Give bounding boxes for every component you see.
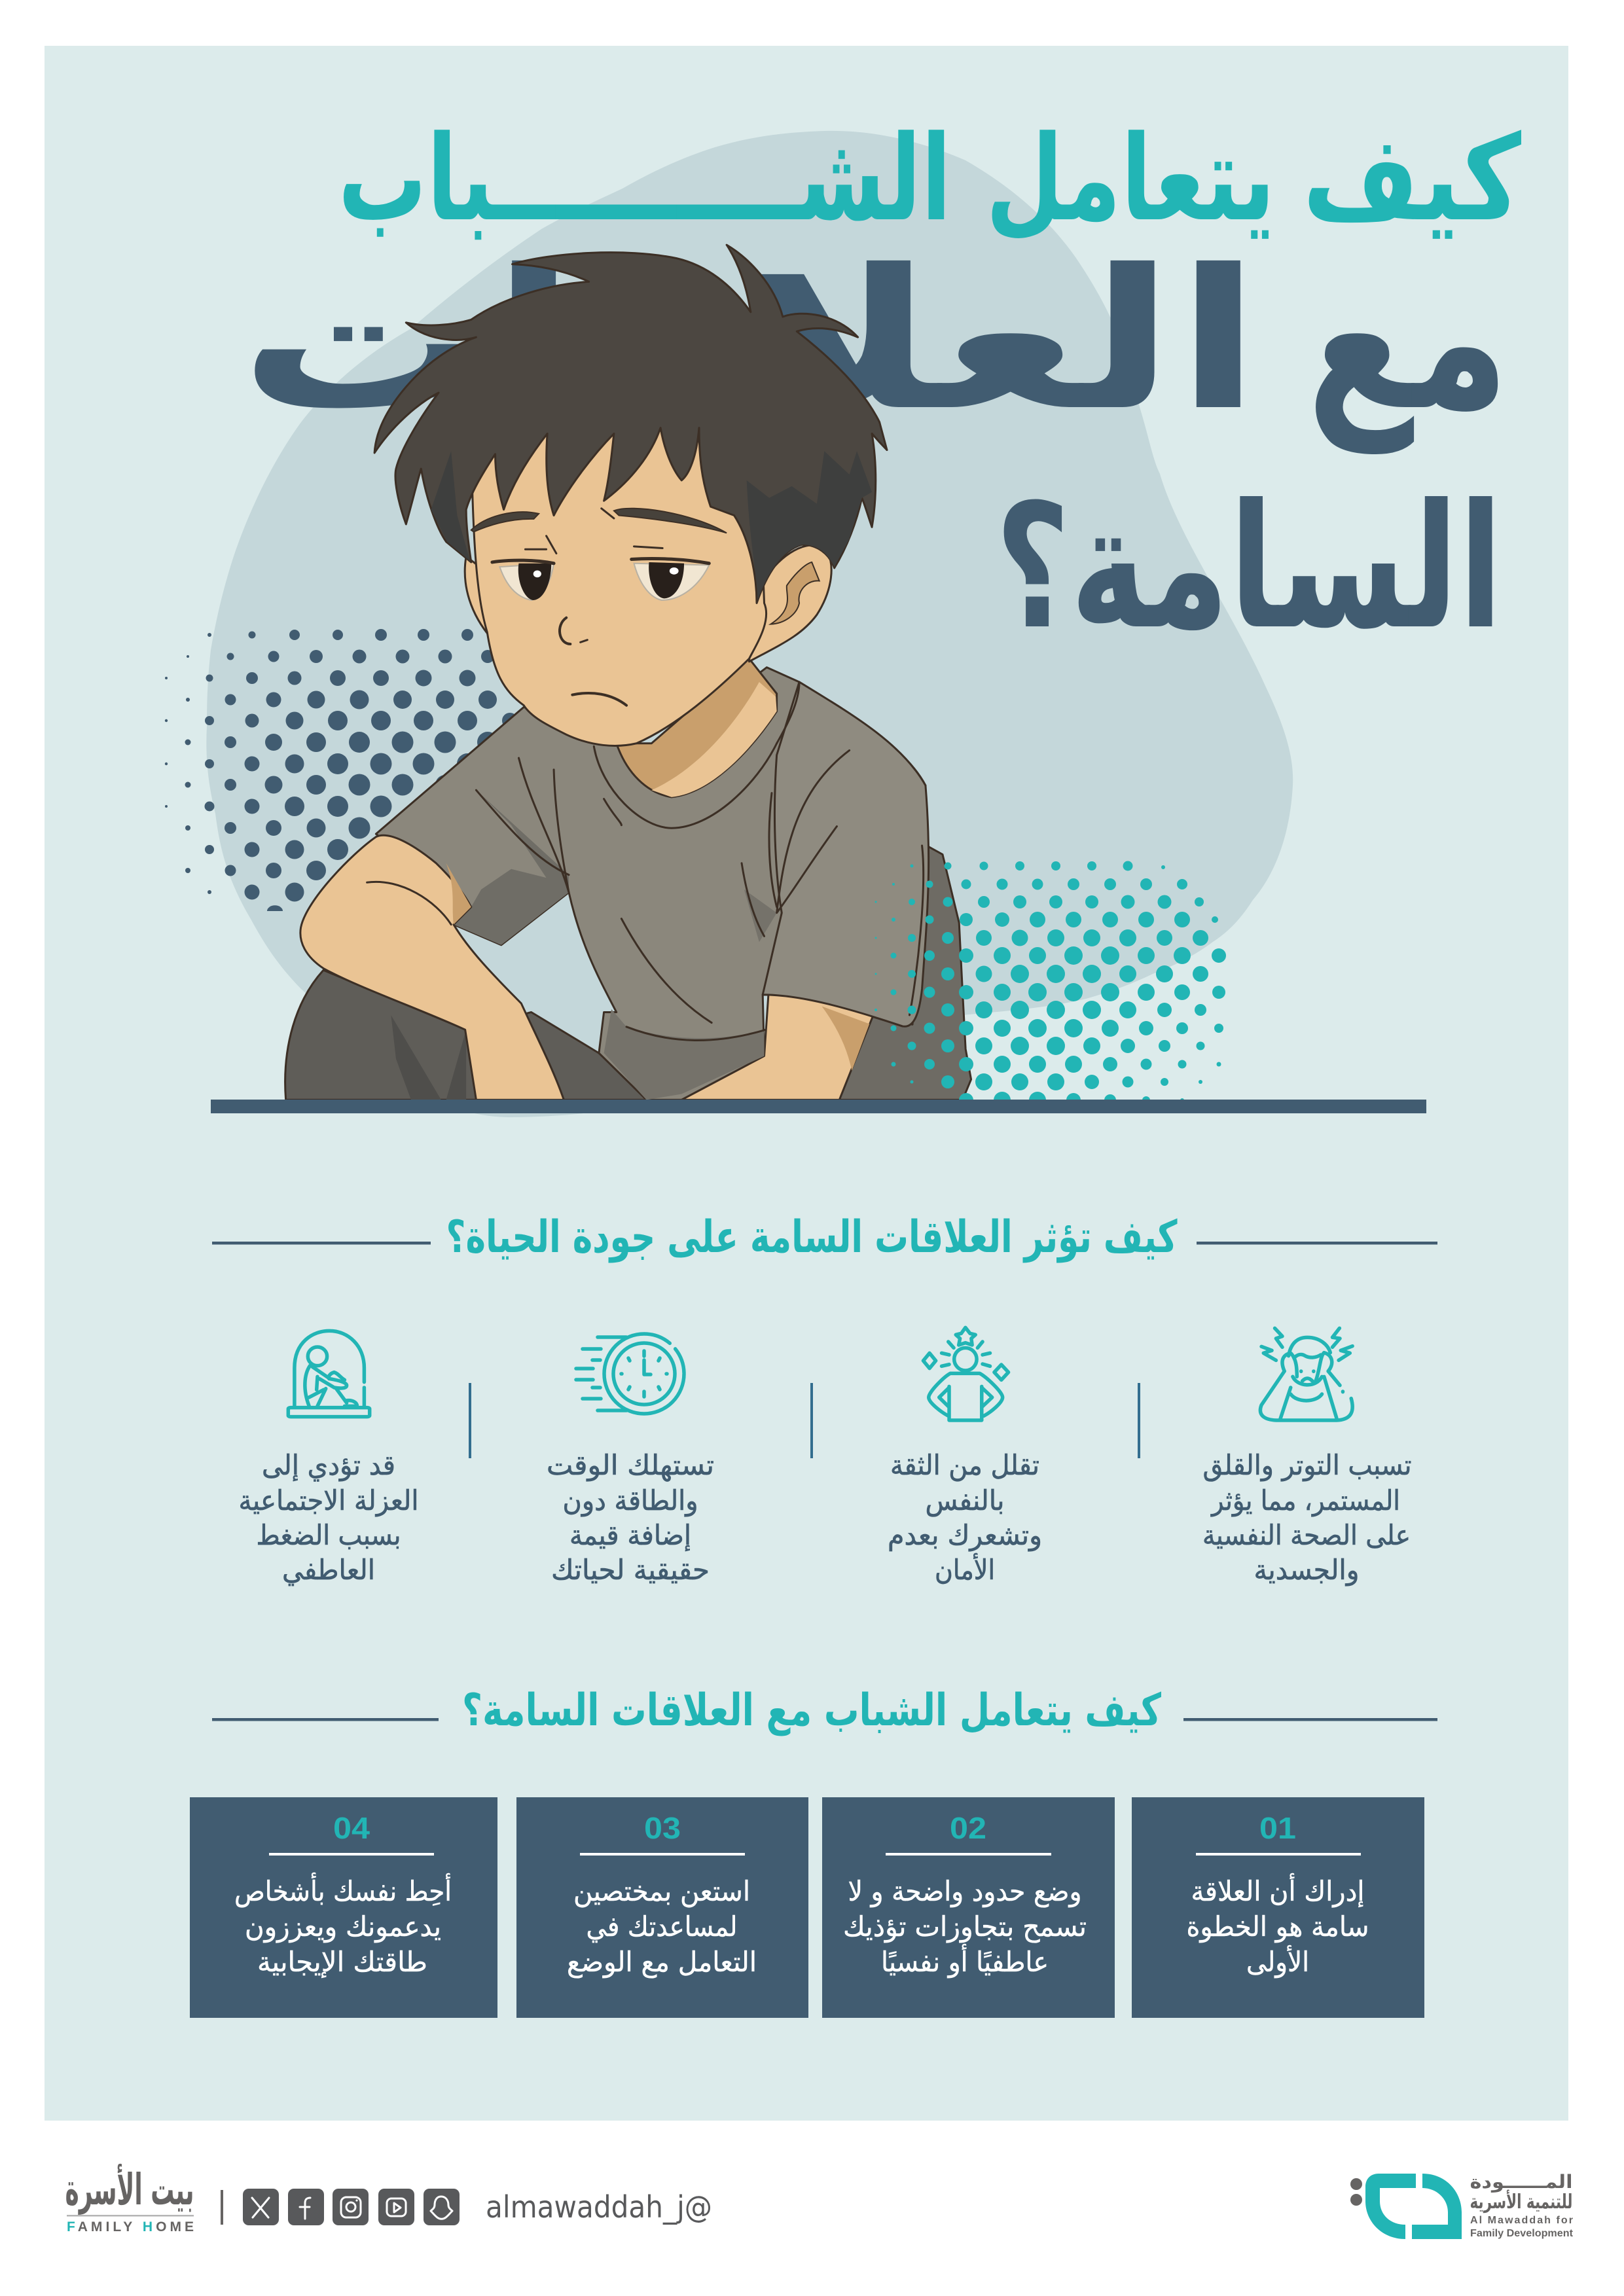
- logo: family home: بيت الأسرة: [65, 2163, 194, 2215]
- text: social isolation: العزلة الاجتماعية: [238, 1484, 419, 1516]
- blue halftone dots: [165, 629, 518, 911]
- boy illustration: [285, 245, 971, 1100]
- logo: al mawaddah: المــــــودة: [1470, 2171, 1572, 2193]
- card 01: إدراك أن العلاقة: [1191, 1873, 1364, 1908]
- title line 2: [239, 228, 1509, 456]
- shirt fold lines: [476, 744, 924, 1040]
- title line 1: يتعامل: [986, 111, 1275, 247]
- right arm: [681, 983, 877, 1100]
- card 04: [190, 1797, 497, 2018]
- ear inner shadow: [770, 562, 820, 624]
- icon: x: [243, 2189, 279, 2225]
- left eye: [499, 564, 554, 600]
- text: stress and anxiety: على الصحة النفسية: [1202, 1519, 1411, 1551]
- card 01: سامة هو الخطوة: [1186, 1910, 1369, 1943]
- text: lowers self confidence: الأمان: [935, 1552, 995, 1586]
- card 04: طاقتك الإيجابية: [257, 1946, 427, 1978]
- title line 1: الشــــــــــباب: [338, 111, 952, 247]
- icon: instagram: [333, 2189, 369, 2225]
- text: stress and anxiety: والجسدية: [1254, 1554, 1359, 1586]
- teal halftone dots: [875, 861, 1226, 1109]
- card 03: [516, 1797, 808, 2018]
- icon: fast clock: [576, 1334, 684, 1414]
- icon: isolated person under arch: [288, 1331, 370, 1417]
- card 01: 01: [1259, 1811, 1296, 1845]
- hair: [374, 245, 887, 603]
- title: [239, 111, 1521, 667]
- left eye highlight: [533, 570, 541, 577]
- divider: [810, 1383, 813, 1458]
- left arm cuff shadow: [446, 863, 471, 925]
- card 02: تسمح بتجاوزات تؤذيك: [843, 1910, 1087, 1943]
- card 01: [1132, 1797, 1424, 2018]
- pants: [285, 970, 651, 1100]
- card 04: أحِط نفسك بأشخاص: [234, 1872, 452, 1907]
- card 04: 04: [333, 1811, 370, 1845]
- icon: youtube: [378, 2189, 414, 2225]
- social handle: almawaddah_j@: [486, 2189, 712, 2225]
- divider: [469, 1383, 471, 1458]
- text: consumes time: حقيقية لحياتك: [551, 1554, 710, 1586]
- right eye highlight: [670, 567, 679, 575]
- eyebrows: [471, 512, 539, 532]
- card 03: 03: [644, 1811, 681, 1845]
- right eye: [634, 564, 709, 600]
- icon: facebook: [288, 2189, 324, 2225]
- neck highlight: [651, 682, 777, 797]
- text: stress and anxiety: تسبب التوتر والقلق: [1203, 1449, 1411, 1481]
- text: lowers self confidence: [888, 1449, 1042, 1586]
- icon: snapchat: [424, 2189, 460, 2225]
- card 03: لمساعدتك في: [586, 1910, 737, 1943]
- footer separator: [221, 2190, 223, 2225]
- text: consumes time: إضافة قيمة: [569, 1519, 691, 1552]
- t-shirt: [376, 668, 926, 1100]
- right sleeve: [763, 682, 929, 1026]
- logo: al mawaddah: Al Mawaddah for: [1470, 2215, 1573, 2226]
- collar: [777, 682, 799, 744]
- pants right side: [837, 845, 971, 1100]
- section 1: heading with rules: كيف تؤثر العلاقات السامة على جودة الحياة؟: [446, 1211, 1178, 1263]
- card 02: [822, 1797, 1115, 2018]
- left ear hint: [465, 556, 496, 638]
- text: social isolation: العاطفي: [282, 1554, 375, 1587]
- section 2: heading with rules: كيف يتعامل الشباب مع العلاقات السامة؟: [462, 1685, 1161, 1736]
- card 03: التعامل مع الوضع: [567, 1946, 757, 1979]
- pants shading: [391, 1015, 466, 1100]
- icon: person with star: [923, 1327, 1009, 1420]
- logo: family home: [65, 2163, 194, 2234]
- title line 2: العلاقات: [239, 228, 1261, 453]
- text: social isolation: بسبب الضغط: [257, 1519, 401, 1551]
- card 03: استعن بمختصين: [573, 1875, 750, 1907]
- neck: [617, 658, 777, 797]
- text: social isolation: [238, 1449, 419, 1587]
- logo: family home: FAMILY HOME: [67, 2219, 194, 2234]
- card 02: وضع حدود واضحة و لا: [848, 1875, 1081, 1908]
- text: stress and anxiety: [1202, 1449, 1411, 1586]
- text: consumes time: والطاقة دون: [563, 1484, 698, 1516]
- eyelids and face lines: [492, 509, 709, 706]
- title line 1: [338, 111, 1521, 247]
- text: social isolation: قد تؤدي إلى: [262, 1449, 395, 1482]
- text: consumes time: تستهلك الوقت: [547, 1449, 714, 1482]
- logo: al mawaddah: Family Development: [1470, 2228, 1574, 2239]
- right arm shadow: [822, 1007, 869, 1071]
- title line 2: مع: [1307, 228, 1509, 456]
- text: lowers self confidence: تقلل من الثقة: [890, 1449, 1039, 1481]
- title line 1: كيف: [1303, 111, 1521, 247]
- left arm: [300, 835, 564, 1100]
- icon: distressed person: [1260, 1328, 1352, 1420]
- card 02: 02: [950, 1811, 986, 1845]
- card 02: عاطفيًا أو نفسيًا: [881, 1944, 1049, 1978]
- shirt shadows: [454, 790, 569, 945]
- text: stress and anxiety: المستمر، مما يؤثر: [1210, 1484, 1400, 1516]
- text: lowers self confidence: بالنفس: [926, 1484, 1004, 1516]
- card 01: الأولى: [1246, 1945, 1309, 1978]
- logo: al mawaddah: للتنمية الأسرية: [1470, 2189, 1572, 2214]
- logo: al mawaddah: [1350, 2171, 1574, 2239]
- left arm crease: [367, 882, 451, 925]
- background blob: [206, 131, 1293, 1117]
- ground bar: [211, 1100, 1426, 1113]
- card 04: يدعمونك ويعززون: [245, 1910, 441, 1943]
- right ear: [749, 545, 831, 662]
- divider: [1138, 1383, 1140, 1458]
- text: consumes time: [547, 1449, 714, 1586]
- face: [471, 393, 767, 745]
- text: lowers self confidence: وتشعرك بعدم: [888, 1519, 1042, 1551]
- hair shadow: [747, 451, 872, 600]
